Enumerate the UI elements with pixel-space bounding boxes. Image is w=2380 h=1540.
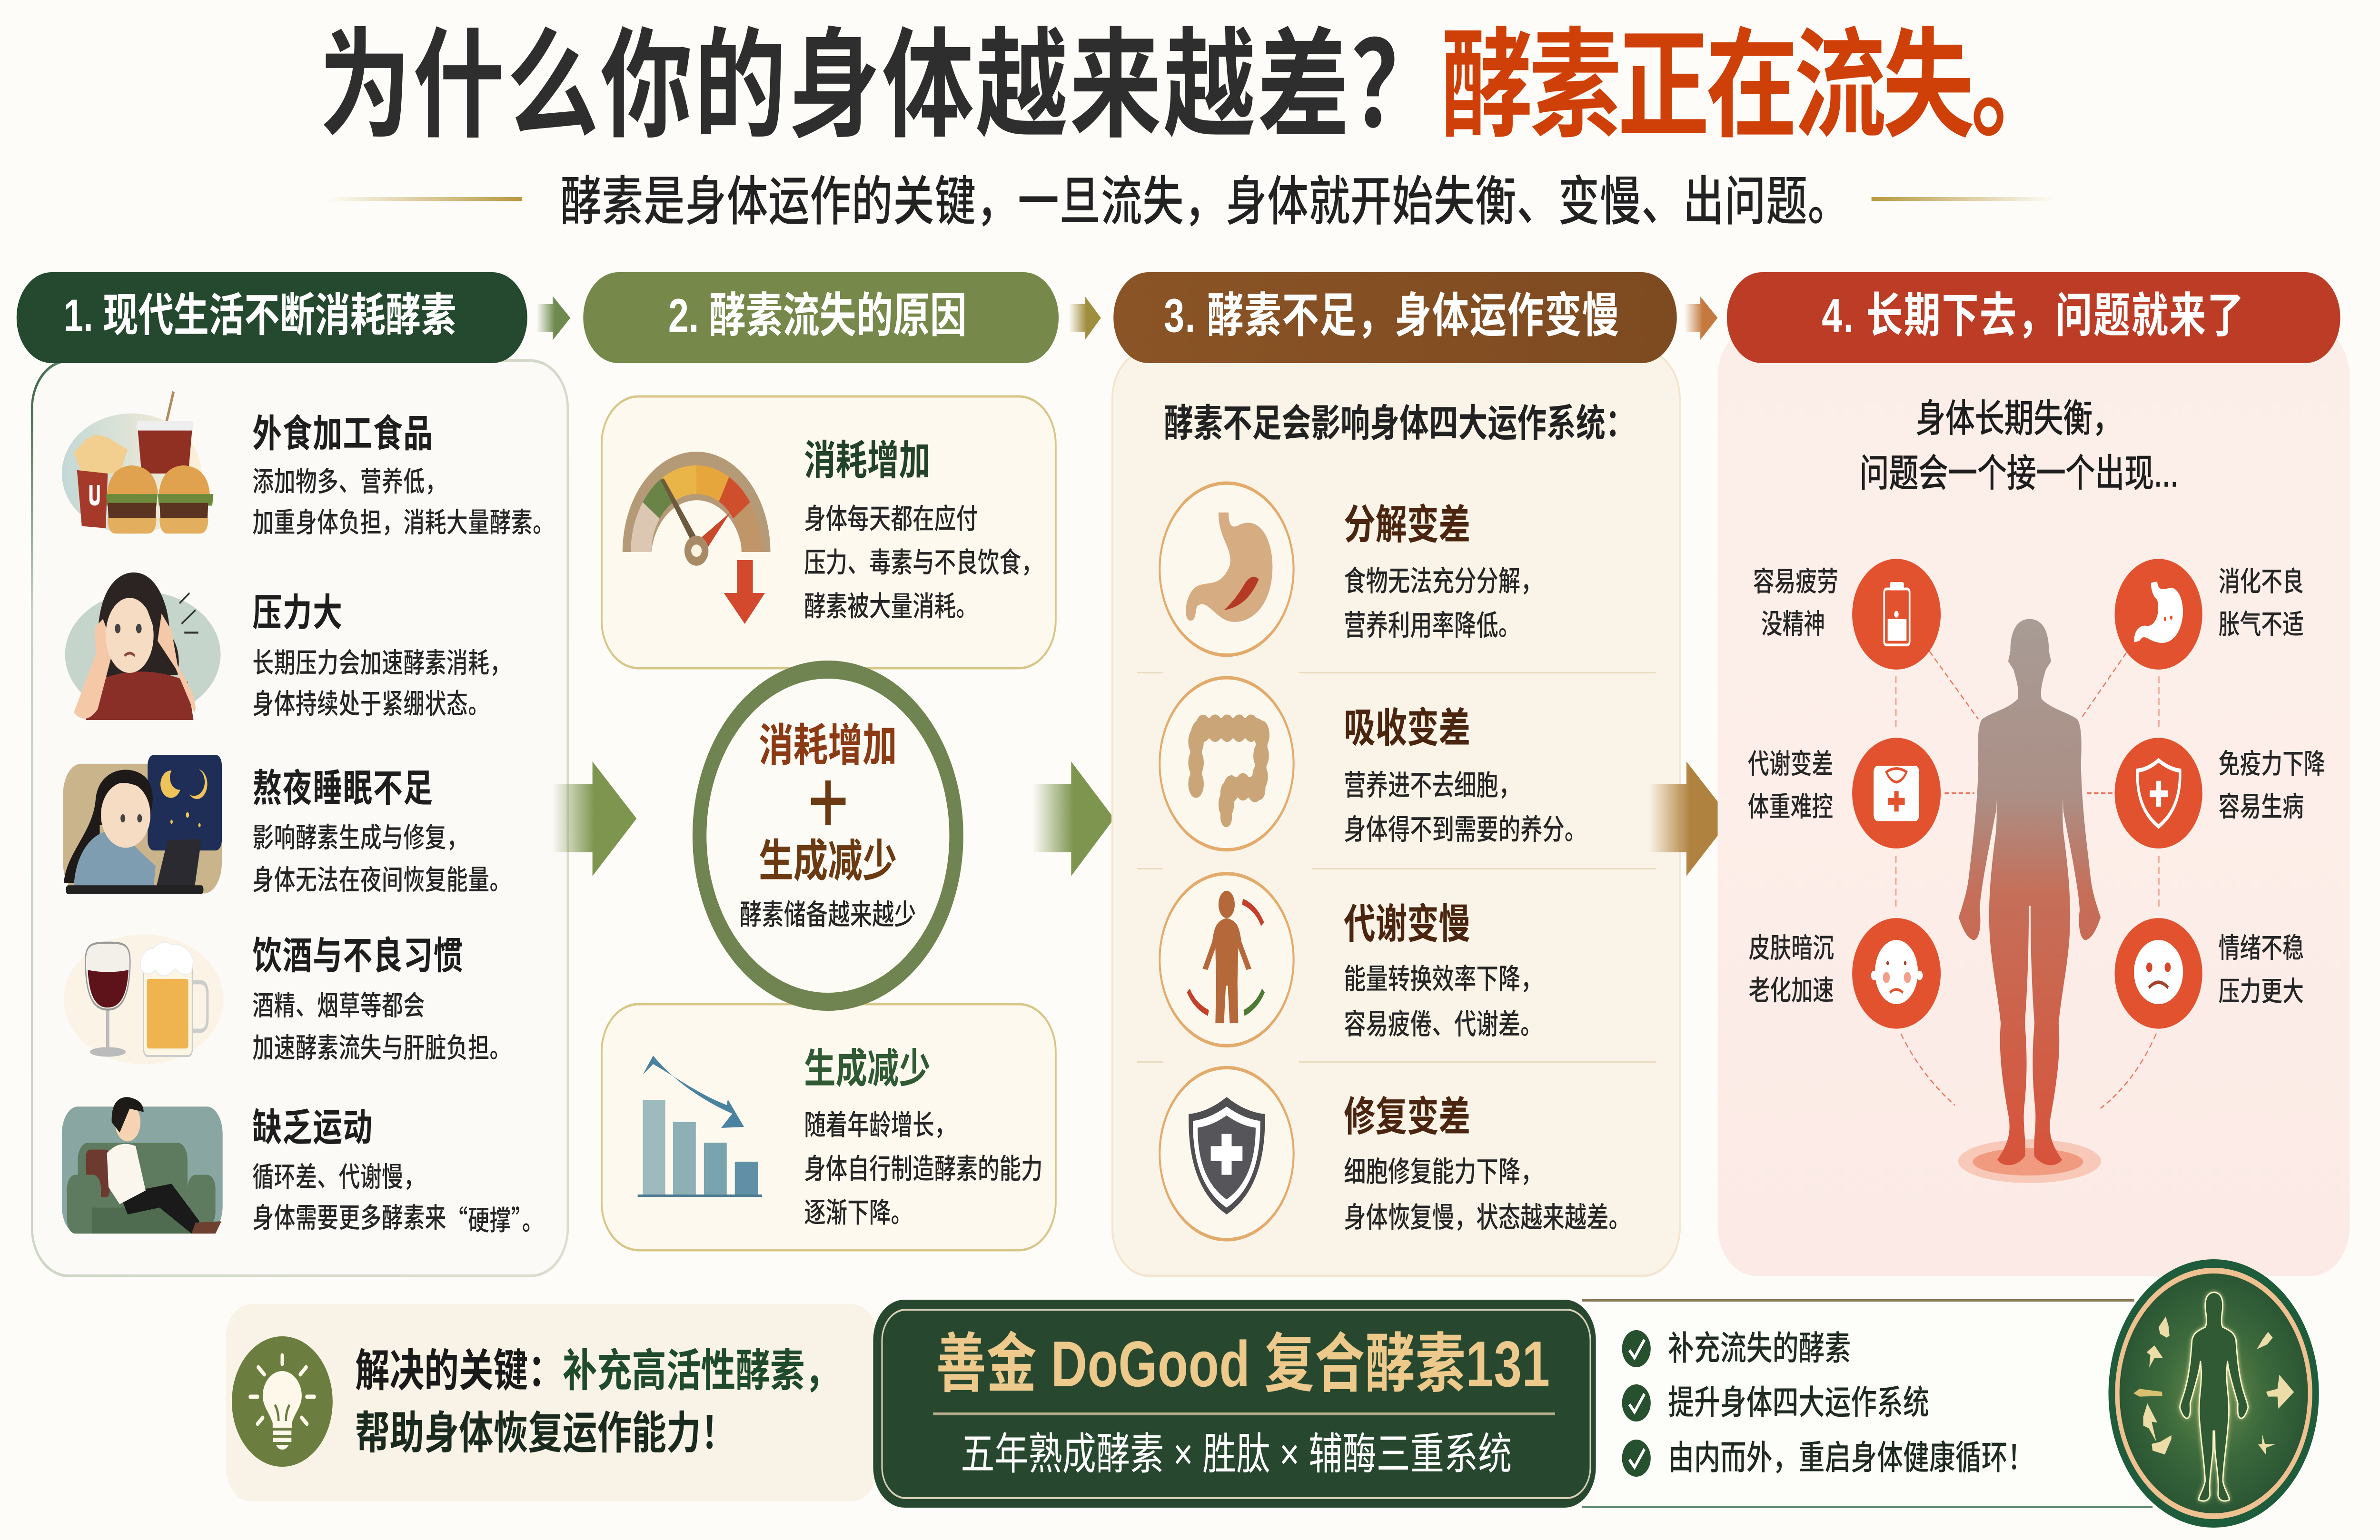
icon: battery	[1852, 559, 1941, 670]
text: breakdown	[1344, 502, 1542, 642]
icon: shield	[1160, 1067, 1294, 1240]
panel: 4 problems	[1718, 327, 2350, 1276]
text: processed food: 外食加工食品	[252, 413, 434, 455]
text: metabolism	[1344, 901, 1542, 1041]
text: solution	[355, 1345, 839, 1458]
check 1: 补充流失的酵素	[1668, 1330, 1851, 1367]
subtitle: 酵素是身体运作的关键，一旦流失，身体就开始失衡、变慢、出问题。	[560, 172, 1849, 232]
icon: lightbulb	[232, 1336, 333, 1467]
icon: wine and beer	[64, 935, 223, 1064]
symptom labels: 代谢变差	[1748, 749, 1833, 779]
center circle: 消耗增加	[759, 720, 897, 770]
text: absorption: 吸收变差	[1344, 705, 1470, 751]
text: repair	[1344, 1094, 1631, 1234]
heading pill 1: 1. 现代生活不断消耗酵素	[64, 290, 456, 341]
card: production down	[602, 1004, 1056, 1250]
dashed connectors	[1896, 651, 2159, 1108]
list: benefits	[1622, 1330, 2033, 1477]
title	[319, 20, 2059, 152]
icon: staying up late	[63, 755, 222, 894]
text: absorption	[1344, 705, 1587, 846]
panel: 1 modern life	[32, 361, 568, 1276]
text: lack of sleep: 熬夜睡眠不足	[252, 767, 434, 810]
text: metabolism: 能量转换效率下降，	[1344, 963, 1542, 996]
card: consumption up	[602, 396, 1056, 668]
text: stress: 长期压力会加速酵素消耗，	[252, 648, 511, 678]
text: solution: 帮助身体恢复运作能力！	[355, 1408, 735, 1458]
text: breakdown: 食物无法充分分解，	[1344, 565, 1542, 598]
heading pill 2: 2. 酵素流失的原因	[668, 289, 967, 342]
text: intro: 酵素不足会影响身体四大运作系统：	[1164, 402, 1635, 445]
dividers row	[1137, 672, 1656, 1063]
symptom labels: 容易疲劳	[1753, 566, 1838, 597]
heading pill 2	[583, 272, 1059, 363]
text: metabolism: 代谢变慢	[1344, 901, 1470, 947]
text: processed food: 加重身体负担，消耗大量酵素。	[252, 507, 554, 538]
text: production: 身体自行制造酵素的能力	[804, 1154, 1043, 1185]
text: no exercise: 身体需要更多酵素来“硬撑”。	[252, 1198, 544, 1238]
icon: metabolism body	[1160, 874, 1294, 1046]
text: production: 随着年龄增长，	[804, 1110, 956, 1141]
text: lack of sleep: 影响酵素生成与修复，	[252, 822, 468, 853]
title: 为什么你的身体越来越差？	[319, 20, 1445, 152]
text: alcohol	[252, 935, 511, 1063]
icon: down arrow	[724, 560, 765, 624]
panel: 2 causes	[602, 396, 1056, 1250]
symptom labels: 免疫力下降	[2219, 749, 2325, 779]
icon: intestine	[1160, 678, 1294, 850]
text: consumption: 身体每天都在应付	[804, 503, 978, 535]
heading pill 4	[1727, 272, 2340, 363]
heading pill 3: 3. 酵素不足，身体运作变慢	[1164, 289, 1620, 342]
text: production: 生成减少	[804, 1046, 931, 1092]
floor glow	[1958, 1139, 2101, 1183]
glowing figure	[2180, 1293, 2248, 1501]
text: consumption: 消耗增加	[804, 438, 931, 484]
check 3: 由内而外，重启身体健康循环！	[1668, 1440, 2033, 1477]
text: repair: 细胞修复能力下降，	[1344, 1156, 1542, 1188]
text: stress	[252, 592, 511, 719]
text: no exercise: 缺乏运动	[252, 1106, 373, 1149]
icon: aging face	[1852, 918, 1941, 1029]
text: processed food: 添加物多、营养低，	[252, 466, 446, 497]
text: processed food	[252, 413, 554, 538]
text: no exercise	[252, 1106, 544, 1238]
text: solution: 解决的关键：补充高活性酵素，	[355, 1345, 839, 1396]
arrow big 2	[1032, 761, 1114, 876]
icon: fast food	[62, 392, 213, 533]
text: production: 逐渐下降。	[804, 1197, 912, 1229]
symptom labels	[1748, 566, 2325, 1007]
badge: glowing body	[2108, 1259, 2319, 1528]
text: breakdown: 营养利用率降低。	[1344, 610, 1520, 642]
text: consumption: 酵素被大量消耗。	[804, 591, 978, 622]
text: production	[804, 1046, 1043, 1229]
text: repair: 修复变差	[1344, 1094, 1470, 1140]
arrow big 1	[552, 761, 636, 876]
symptom labels: 胀气不适	[2219, 609, 2304, 640]
diagram: body with symptoms	[1852, 559, 2202, 1183]
text: repair: 身体恢复慢，状态越来越差。	[1344, 1202, 1631, 1234]
icon: person on sofa	[62, 1097, 223, 1234]
symptom labels: 消化不良	[2219, 566, 2304, 597]
symptom labels: 皮肤暗沉	[1748, 933, 1834, 963]
text: lack of sleep	[252, 767, 511, 895]
panel: product: 善金 DoGood 复合酵素131	[936, 1328, 1550, 1400]
symptom labels: 没精神	[1761, 609, 1825, 639]
heading pill 1	[17, 272, 527, 363]
text: consumption: 压力、毒素与不良饮食，	[804, 547, 1043, 579]
text: alcohol: 酒精、烟草等都会	[252, 990, 425, 1021]
heading pill 4: 4. 长期下去，问题就来了	[1822, 289, 2245, 342]
arrow 2 small	[1069, 296, 1101, 340]
human figure	[1959, 619, 2101, 1165]
text: lack of sleep: 身体无法在夜间恢复能量。	[252, 865, 511, 895]
icon: scale	[1852, 738, 1941, 849]
callout: key solution	[226, 1304, 877, 1501]
center circle: 生成减少	[759, 836, 897, 886]
text: absorption: 身体得不到需要的养分。	[1344, 814, 1587, 846]
text: no exercise: 循环差、代谢慢，	[252, 1162, 425, 1192]
text: alcohol: 饮酒与不良习惯	[252, 935, 464, 977]
symptom labels: 老化加速	[1748, 975, 1834, 1006]
center circle	[700, 670, 956, 1002]
text: intro: 问题会一个接一个出现...	[1860, 452, 2179, 495]
text: stress: 压力大	[252, 592, 343, 634]
center circle: 酵素储备越来越少	[740, 899, 916, 931]
text: metabolism: 容易疲倦、代谢差。	[1344, 1008, 1542, 1041]
title: 酵素正在流失。	[1441, 20, 2059, 152]
icon: sad face	[2115, 918, 2202, 1029]
text: breakdown: 分解变差	[1344, 502, 1470, 548]
check 2: 提升身体四大运作系统	[1668, 1384, 1929, 1422]
arrow big 3	[1649, 761, 1731, 876]
text: absorption: 营养进不去细胞，	[1344, 770, 1520, 802]
icon: stressed woman	[65, 573, 220, 720]
arrow 1 small	[536, 296, 570, 340]
heading pill 3	[1113, 272, 1677, 363]
symptom labels: 容易生病	[2219, 791, 2304, 822]
panel: product: 五年熟成酵素 × 胜肽 × 辅酶三重系统	[961, 1430, 1512, 1479]
text: stress: 身体持续处于紧绷状态。	[252, 689, 490, 719]
panel: 3 slowdown	[1112, 351, 1680, 1276]
rule lines of product strip	[1582, 1299, 2152, 1508]
text: intro	[1860, 397, 2179, 495]
panel: product	[873, 1300, 1596, 1508]
text: consumption	[804, 438, 1043, 622]
icon: stomach	[2115, 559, 2202, 670]
icon: stomach	[1160, 483, 1294, 655]
icon: immune shield	[2115, 738, 2202, 849]
arrow 3 small	[1685, 296, 1718, 340]
text: intro: 身体长期失衡，	[1916, 397, 2122, 440]
icon: gold leaves and arrows	[2133, 1316, 2294, 1455]
symptom labels: 体重难控	[1748, 791, 1833, 822]
symptom labels: 情绪不稳	[2219, 933, 2304, 963]
text: alcohol: 加速酵素流失与肝脏负担。	[252, 1033, 511, 1063]
icon: gauge	[623, 452, 770, 566]
chart: falling bars	[638, 1056, 762, 1197]
symptom labels: 压力更大	[2219, 976, 2304, 1007]
